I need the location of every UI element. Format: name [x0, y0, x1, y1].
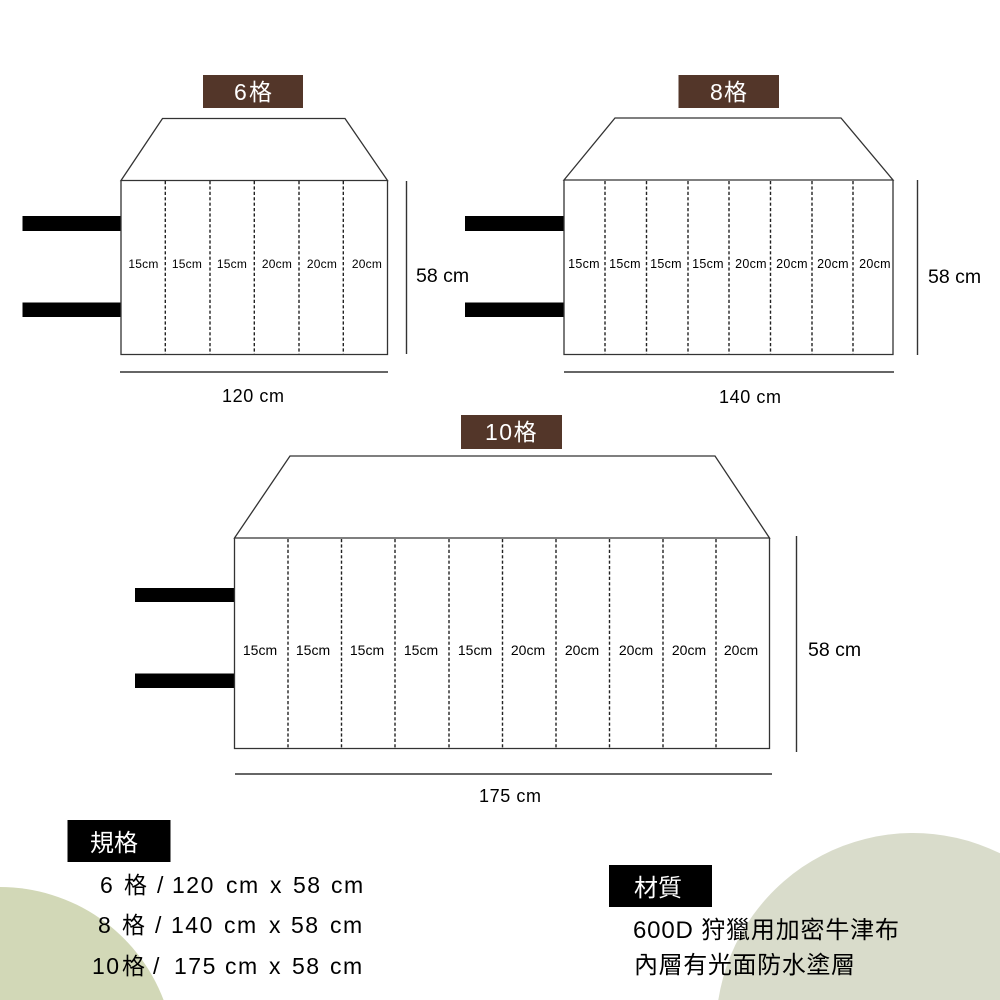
heading: 8 compartments: 格 [724, 79, 747, 105]
spec list: cm [224, 912, 258, 938]
diagram: 8-compartment roll [465, 75, 981, 407]
straps [135, 588, 234, 688]
pocket width labels [243, 642, 758, 658]
spec list: x [270, 872, 283, 898]
width dimension: 175 cm [479, 786, 541, 806]
spec list: / [157, 872, 165, 898]
panel: material [609, 865, 899, 979]
pocket width labels: 15cm [350, 642, 384, 658]
spec list: cm [330, 912, 364, 938]
width dimension: 120 cm [222, 386, 284, 406]
height dimension: 58 cm [808, 639, 861, 661]
pocket width labels: 15cm [128, 257, 159, 271]
spec list: 175 [174, 953, 217, 979]
spec list: 58 [291, 912, 320, 938]
pocket width labels: 15cm [568, 257, 600, 271]
pocket width labels: 15cm [296, 642, 330, 658]
spec list: 格 [122, 912, 146, 938]
pocket width labels: 15cm [217, 257, 247, 271]
material description [633, 917, 899, 979]
spec list: 140 [171, 912, 214, 938]
spec list: x [269, 953, 282, 979]
pocket width labels: 15cm [404, 642, 438, 658]
spec list: cm [330, 953, 364, 979]
heading: 6 compartments: 格 [249, 79, 272, 105]
spec list: x [269, 912, 282, 938]
pocket width labels: 15cm [172, 257, 202, 271]
spec list: / [155, 912, 163, 938]
pocket width labels: 20cm [776, 257, 808, 271]
pocket width labels: 20cm [352, 257, 382, 271]
spec list: cm [225, 953, 259, 979]
heading: 10 compartments [461, 415, 562, 449]
spec list: 120 [172, 872, 215, 898]
heading: 10 compartments: 10格 [485, 419, 538, 445]
heading: specifications: 規格 [90, 830, 138, 857]
heading: material [609, 865, 712, 907]
spec list: 8 [98, 912, 112, 938]
heading: 8 compartments [678, 75, 779, 108]
width dimension: 140 cm [719, 387, 781, 407]
pocket width labels: 20cm [511, 642, 545, 658]
pocket width labels: 20cm [262, 257, 292, 271]
pocket width labels: 15cm [458, 642, 492, 658]
spec list: / [153, 953, 161, 979]
stitch lines [165, 181, 343, 354]
pocket width labels: 15cm [243, 642, 277, 658]
pocket width labels: 20cm [307, 257, 337, 271]
straps [22, 216, 121, 317]
diagram: 6-compartment roll [22, 75, 469, 406]
spec list: 58 [292, 953, 321, 979]
roll outline [564, 118, 893, 354]
material description: 內層有光面防水塗層 [634, 952, 855, 979]
diagram: 10-compartment roll [135, 415, 861, 806]
pocket width labels: 20cm [859, 257, 891, 271]
pocket width labels: 15cm [650, 257, 682, 271]
spec list: 6 [100, 872, 114, 898]
pocket width labels: 20cm [619, 642, 653, 658]
pocket width labels: 20cm [672, 642, 706, 658]
decorative shape: sage bottom right [718, 833, 1000, 1000]
heading: specifications [68, 820, 170, 862]
panel: specifications [68, 820, 365, 979]
roll outline [234, 456, 770, 748]
pocket width labels: 20cm [817, 257, 849, 271]
material description: 600D 狩獵用加密牛津布 [633, 917, 899, 944]
decorative shape: olive bottom left [0, 887, 164, 1000]
spec list: cm [226, 872, 260, 898]
pocket width labels: 15cm [609, 257, 641, 271]
spec list: 格 [122, 953, 146, 979]
heading: 8 compartments: 8 [710, 79, 723, 105]
pocket width labels [568, 257, 891, 271]
straps [465, 216, 564, 317]
roll outline [121, 118, 388, 354]
heading: material: 材質 [634, 875, 682, 902]
spec list: 10 [92, 953, 121, 979]
height dimension: 58 cm [416, 265, 469, 287]
height dimension: 58 cm [928, 266, 981, 288]
spec list: cm [331, 872, 365, 898]
pocket width labels: 20cm [565, 642, 599, 658]
heading: 6 compartments [203, 75, 303, 108]
stitch lines [605, 181, 853, 354]
pocket width labels: 20cm [724, 642, 758, 658]
pocket width labels [128, 257, 382, 271]
stitch lines [288, 539, 716, 748]
spec list [92, 872, 365, 979]
pocket width labels: 20cm [735, 257, 767, 271]
spec list: 58 [293, 872, 322, 898]
heading: 6 compartments: 6 [234, 79, 247, 105]
pocket width labels: 15cm [692, 257, 724, 271]
spec list: 格 [124, 872, 148, 898]
